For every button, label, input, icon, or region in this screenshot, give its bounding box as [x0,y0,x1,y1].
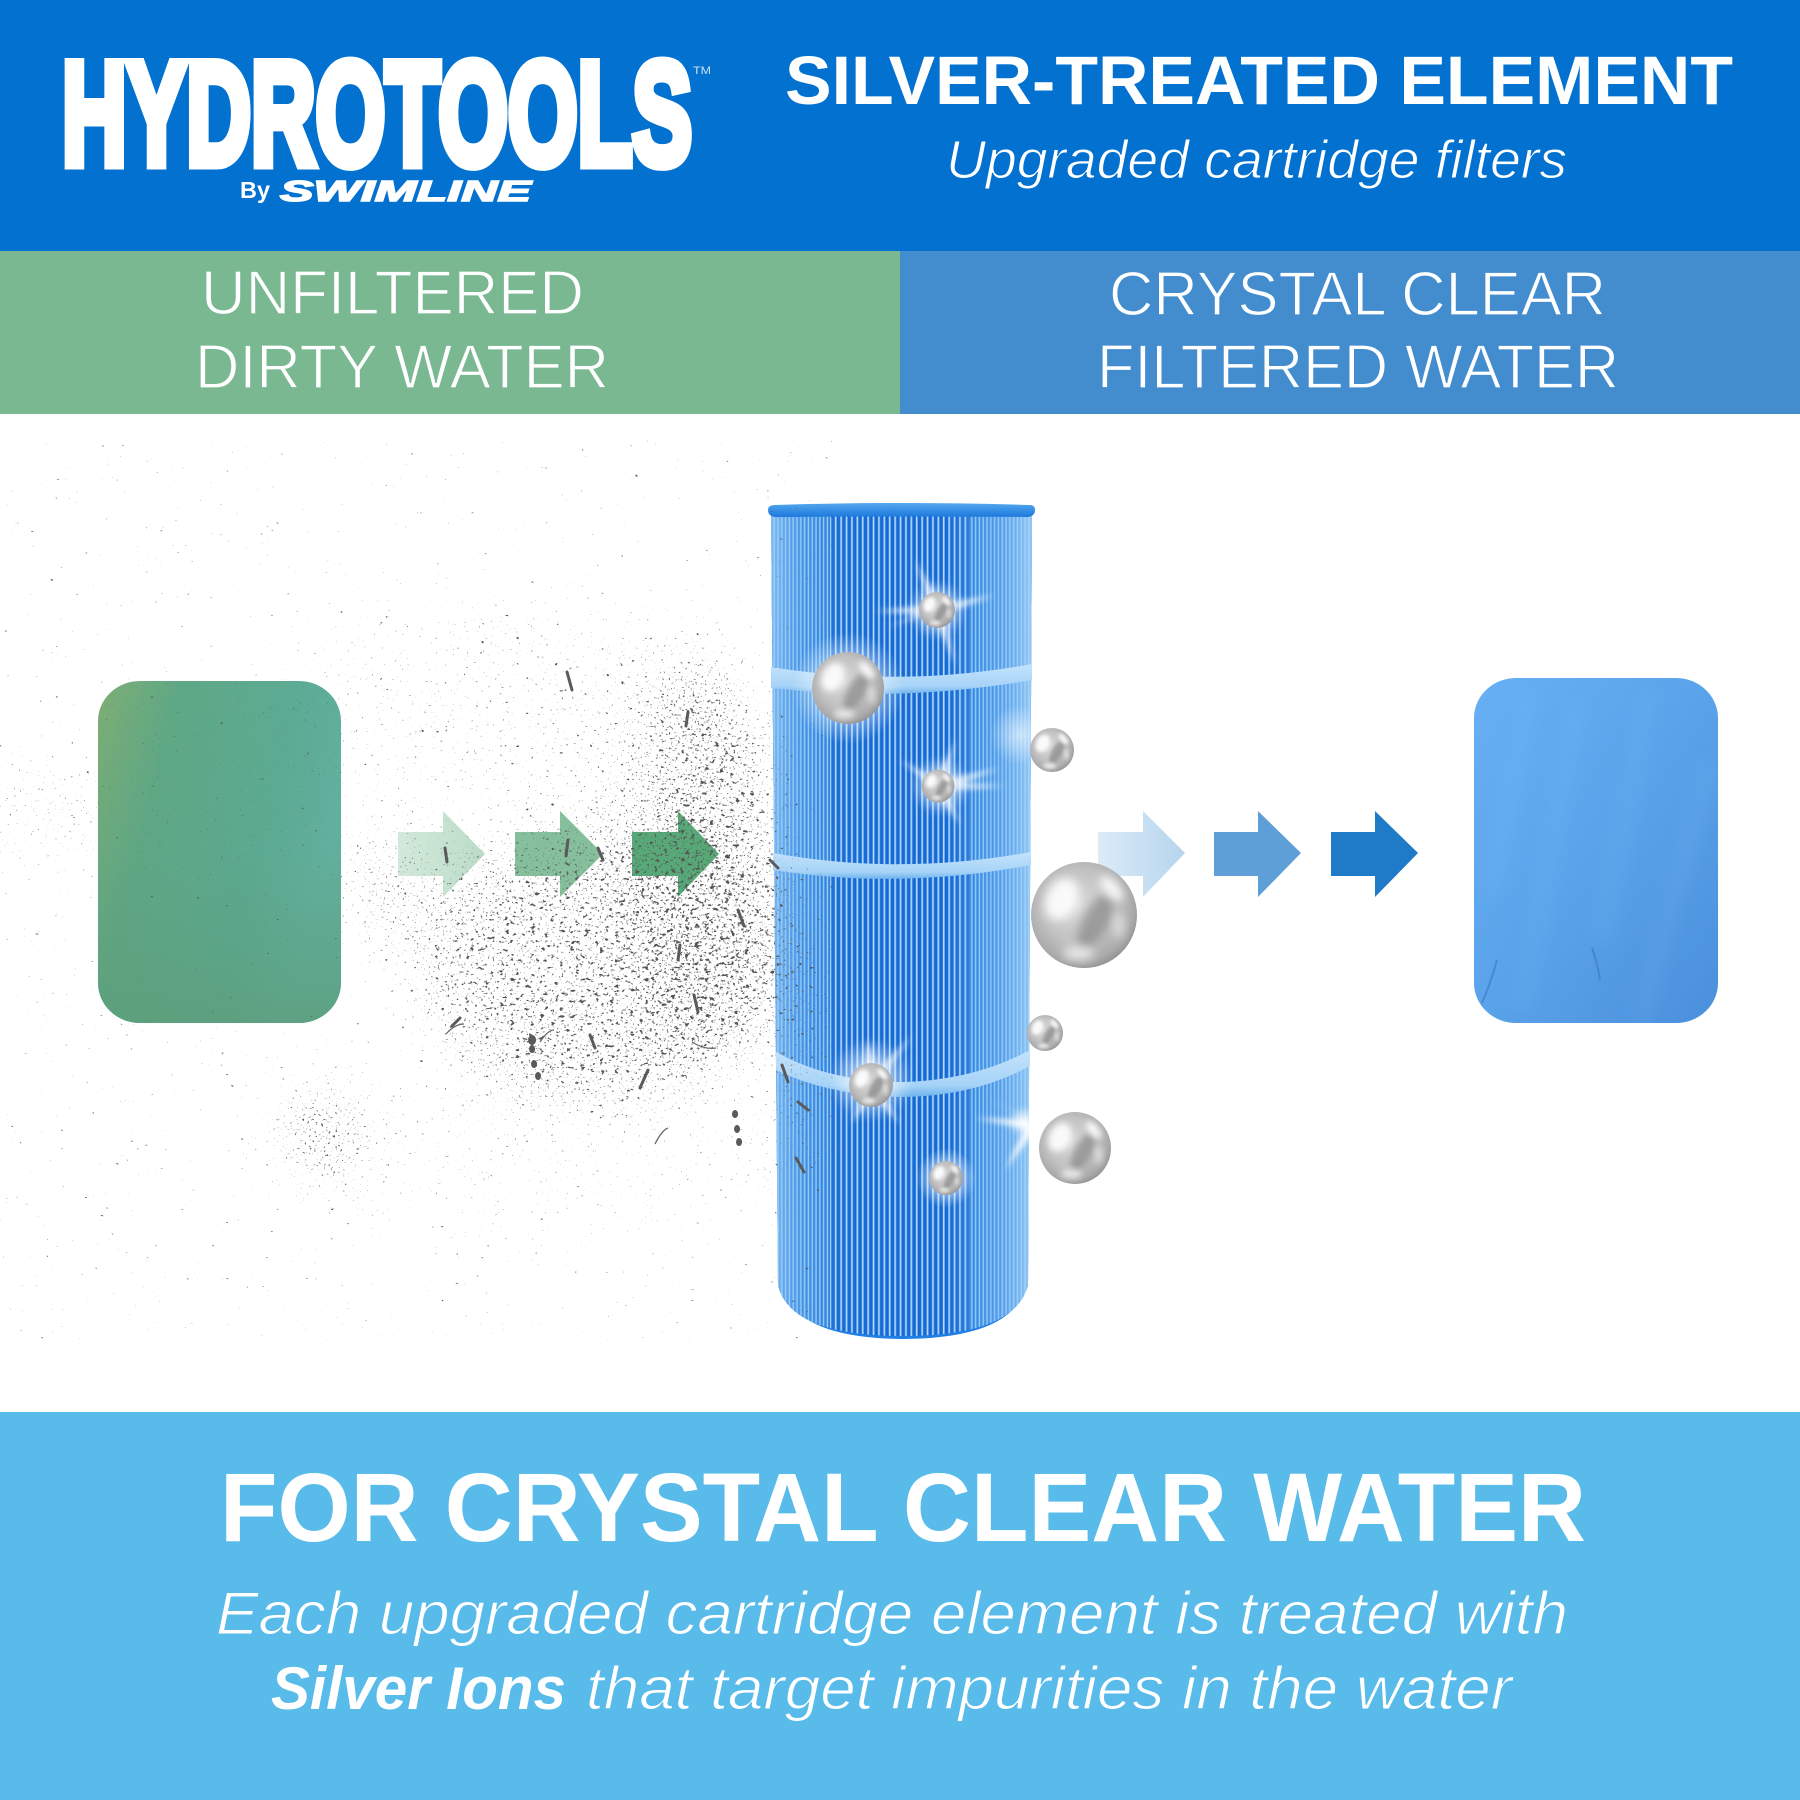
logo: Hydrotools by Swimline: HYDROTOOLS [62,32,692,195]
panel: unfiltered dirty water label: DIRTY WATER [195,333,609,402]
arrow: green medium [515,811,603,897]
logo: Hydrotools by Swimline: TM [693,65,711,77]
panel: bottom banner [0,1412,1800,1800]
silver ball 7 [849,1063,893,1107]
arrow: blue light [1098,811,1185,897]
panel: top header [0,0,1800,251]
sparkle: glow at band three ball [829,1035,913,1125]
cartridge top rim [768,503,1035,517]
logo: Hydrotools by Swimline: SWIMLINE [280,176,534,208]
dirt particles [0,590,828,1240]
sparkle: glow around middle small ball [900,740,1005,825]
subheading: upgraded cartridge filters: Upgraded cartridge filters [946,130,1567,190]
body line 2: that target impurities in the water [586,1655,1514,1722]
panel: clean water swatch [1474,678,1718,1023]
heading: for crystal clear water: FOR CRYSTAL CLEAR WATER [220,1453,1586,1562]
logo: Hydrotools by Swimline: By [240,177,270,203]
coarse debris spray [400,620,825,1180]
sparkle: flare left of lower right ball [975,1098,1040,1170]
cartridge band 1 [771,664,1032,694]
silver ball 1 [919,592,955,628]
sparkle: flare left of right upper ball [990,705,1050,765]
panel: unfiltered dirty water label [0,251,900,414]
silver ball 2 [812,652,884,724]
arrow: blue dark [1331,811,1418,897]
cartridge band 3 [776,1050,1030,1097]
panel: crystal clear filtered water label: CRYSTAL CLEAR [1109,260,1606,329]
panel: dirty water swatch [98,681,341,1023]
filter cartridge [768,503,1038,1340]
silver ball 9 [929,1161,963,1195]
logo: Hydrotools by Swimline [62,32,711,208]
arrow: green light [398,811,485,897]
cartridge pleated body [768,510,1038,1340]
body line 2: Silver Ions [271,1655,566,1722]
silver ball 5 [1031,862,1137,968]
body line 1: Each upgraded cartridge element is treated with [216,1580,1568,1647]
heading: silver-treated element: SILVER-TREATED ELEMENT [785,42,1733,119]
fine debris spray [0,590,828,1240]
large debris flecks [445,672,808,1172]
silver ball 4 [922,770,954,802]
sparkle: glow around large ball on band [792,632,904,744]
cartridge band 2 [773,852,1031,879]
arrow: green dark [632,811,719,897]
silver ball 3 [1030,728,1074,772]
sparkle: glow around upper small ball [875,560,995,665]
silver ball 8 [1039,1112,1111,1184]
arrow: blue medium [1214,811,1301,897]
panel: crystal clear filtered water label [900,251,1800,414]
sparkle: glow at lower ball on body [916,1148,976,1208]
silver ball 6 [1027,1015,1063,1051]
cartridge bottom rim [782,1275,1027,1339]
panel: unfiltered dirty water label: UNFILTERED [201,259,584,328]
panel: crystal clear filtered water label: FILTERED WATER [1097,333,1619,402]
